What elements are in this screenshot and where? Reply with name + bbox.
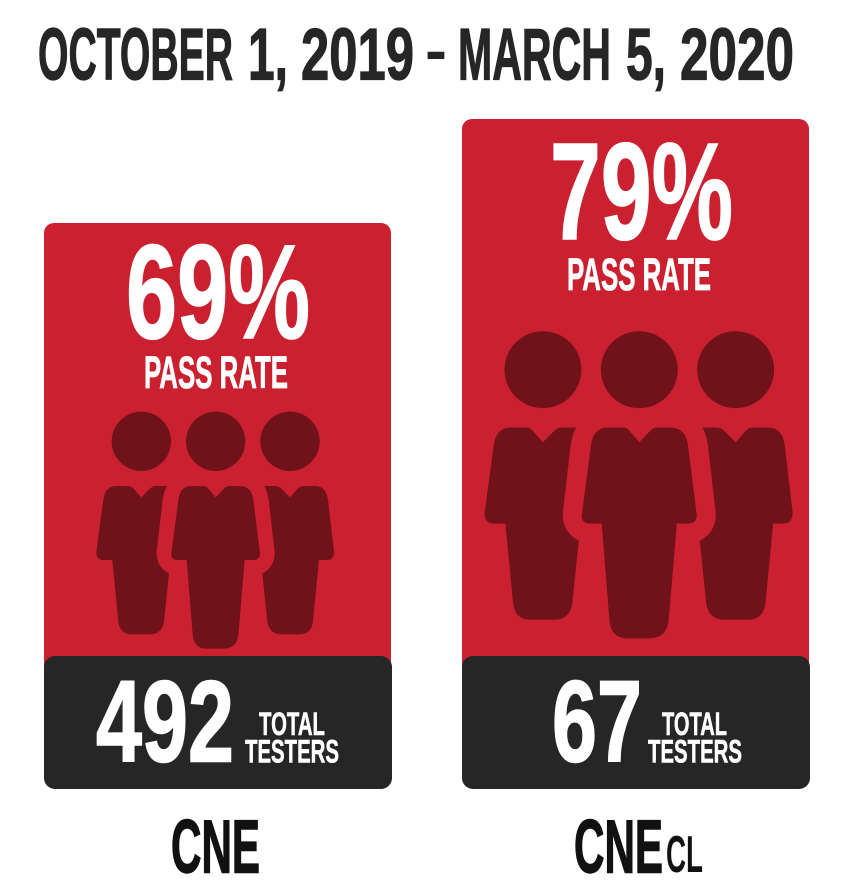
- CNEcl red card background: [462, 119, 809, 683]
- CNE pass rate label: PASS RATE: [144, 347, 288, 398]
- title: 1,: [248, 14, 288, 96]
- CNE total testers number: 492: [96, 656, 234, 786]
- CNE testers label: TESTERS: [245, 734, 339, 770]
- panel: CNEcl: [462, 115, 810, 789]
- CNEcl testers label: TESTERS: [648, 734, 742, 770]
- CNE total testers bar: [44, 656, 392, 789]
- title: -: [425, 17, 447, 84]
- CNE total label: TOTAL: [259, 706, 325, 742]
- CNEcl total label: TOTAL: [662, 706, 727, 742]
- title: 2020: [680, 14, 794, 96]
- CNE pass rate percentage: 69%: [126, 218, 310, 367]
- title: OCTOBER: [38, 14, 233, 96]
- CNEcl pass rate percentage: 79%: [550, 115, 733, 269]
- CNEcl total testers number: 67: [552, 656, 642, 786]
- CNEcl caption: CL: [666, 826, 703, 884]
- title: MARCH: [458, 14, 611, 96]
- CNE caption: CNE: [171, 804, 260, 888]
- CNEcl pass rate label: PASS RATE: [567, 249, 711, 300]
- title: 5,: [626, 14, 666, 96]
- icon: CNE group of people: [96, 412, 334, 649]
- title: 2019: [301, 14, 414, 96]
- CNEcl caption: CNE: [574, 804, 663, 888]
- title: [38, 14, 794, 96]
- CNE red card background: [44, 223, 391, 683]
- CNEcl total testers bar: [462, 656, 810, 789]
- panel: CNE: [44, 218, 392, 789]
- icon: CNEcl group of people: [485, 331, 793, 638]
